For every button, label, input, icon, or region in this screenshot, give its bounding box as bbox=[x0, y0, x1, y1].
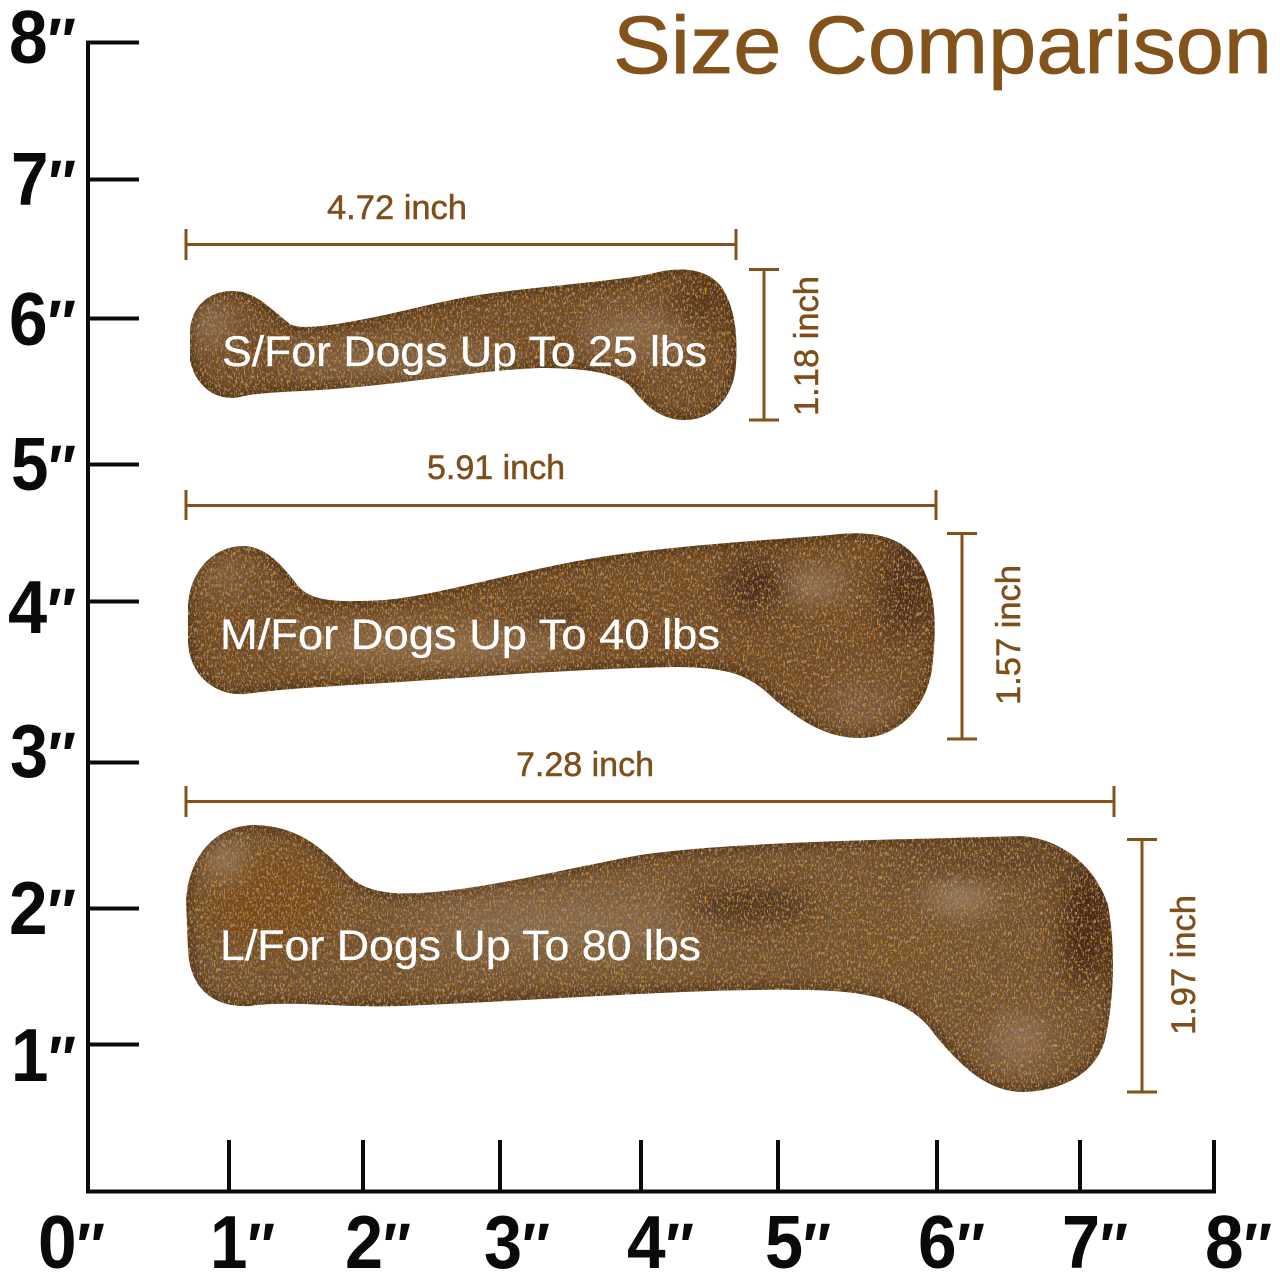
large bone height dimension bbox=[1127, 839, 1203, 1092]
small bone width dimension bbox=[186, 189, 736, 260]
small bone height dimension bbox=[749, 269, 826, 420]
vertical ruler axis bbox=[88, 42, 139, 1193]
large bone height dimension: 1.97 inch bbox=[1165, 895, 1203, 1035]
medium bone width dimension: 5.91 inch bbox=[427, 449, 565, 487]
size label: small: S/For Dogs Up To 25 lbs bbox=[222, 328, 707, 376]
size label: medium: M/For Dogs Up To 40 lbs bbox=[220, 611, 720, 659]
medium bone bbox=[180, 525, 945, 745]
horizontal ruler labels bbox=[38, 1200, 1272, 1280]
small bone bbox=[190, 270, 737, 420]
title: Size Comparison bbox=[613, 0, 1272, 91]
medium bone width dimension bbox=[186, 449, 936, 520]
small bone width dimension: 4.72 inch bbox=[327, 189, 467, 227]
vertical ruler labels: 6″ bbox=[9, 277, 76, 361]
medium bone height dimension bbox=[947, 533, 1028, 739]
vertical ruler labels: 5″ bbox=[11, 422, 76, 506]
vertical ruler labels: 4″ bbox=[8, 565, 76, 649]
small bone height dimension: 1.18 inch bbox=[788, 276, 826, 416]
size label: large: L/For Dogs Up To 80 lbs bbox=[220, 922, 701, 970]
vertical ruler labels: 2″ bbox=[9, 866, 76, 950]
large bone width dimension: 7.28 inch bbox=[516, 746, 654, 784]
large bone width dimension bbox=[186, 746, 1114, 817]
vertical ruler labels: 1″ bbox=[11, 1013, 76, 1097]
vertical ruler labels bbox=[8, 0, 76, 1097]
horizontal ruler axis bbox=[86, 1140, 1216, 1192]
vertical ruler labels: 7″ bbox=[11, 137, 76, 221]
large bone bbox=[180, 820, 1120, 1100]
vertical ruler labels: 3″ bbox=[10, 709, 76, 793]
medium bone height dimension: 1.57 inch bbox=[990, 565, 1028, 705]
